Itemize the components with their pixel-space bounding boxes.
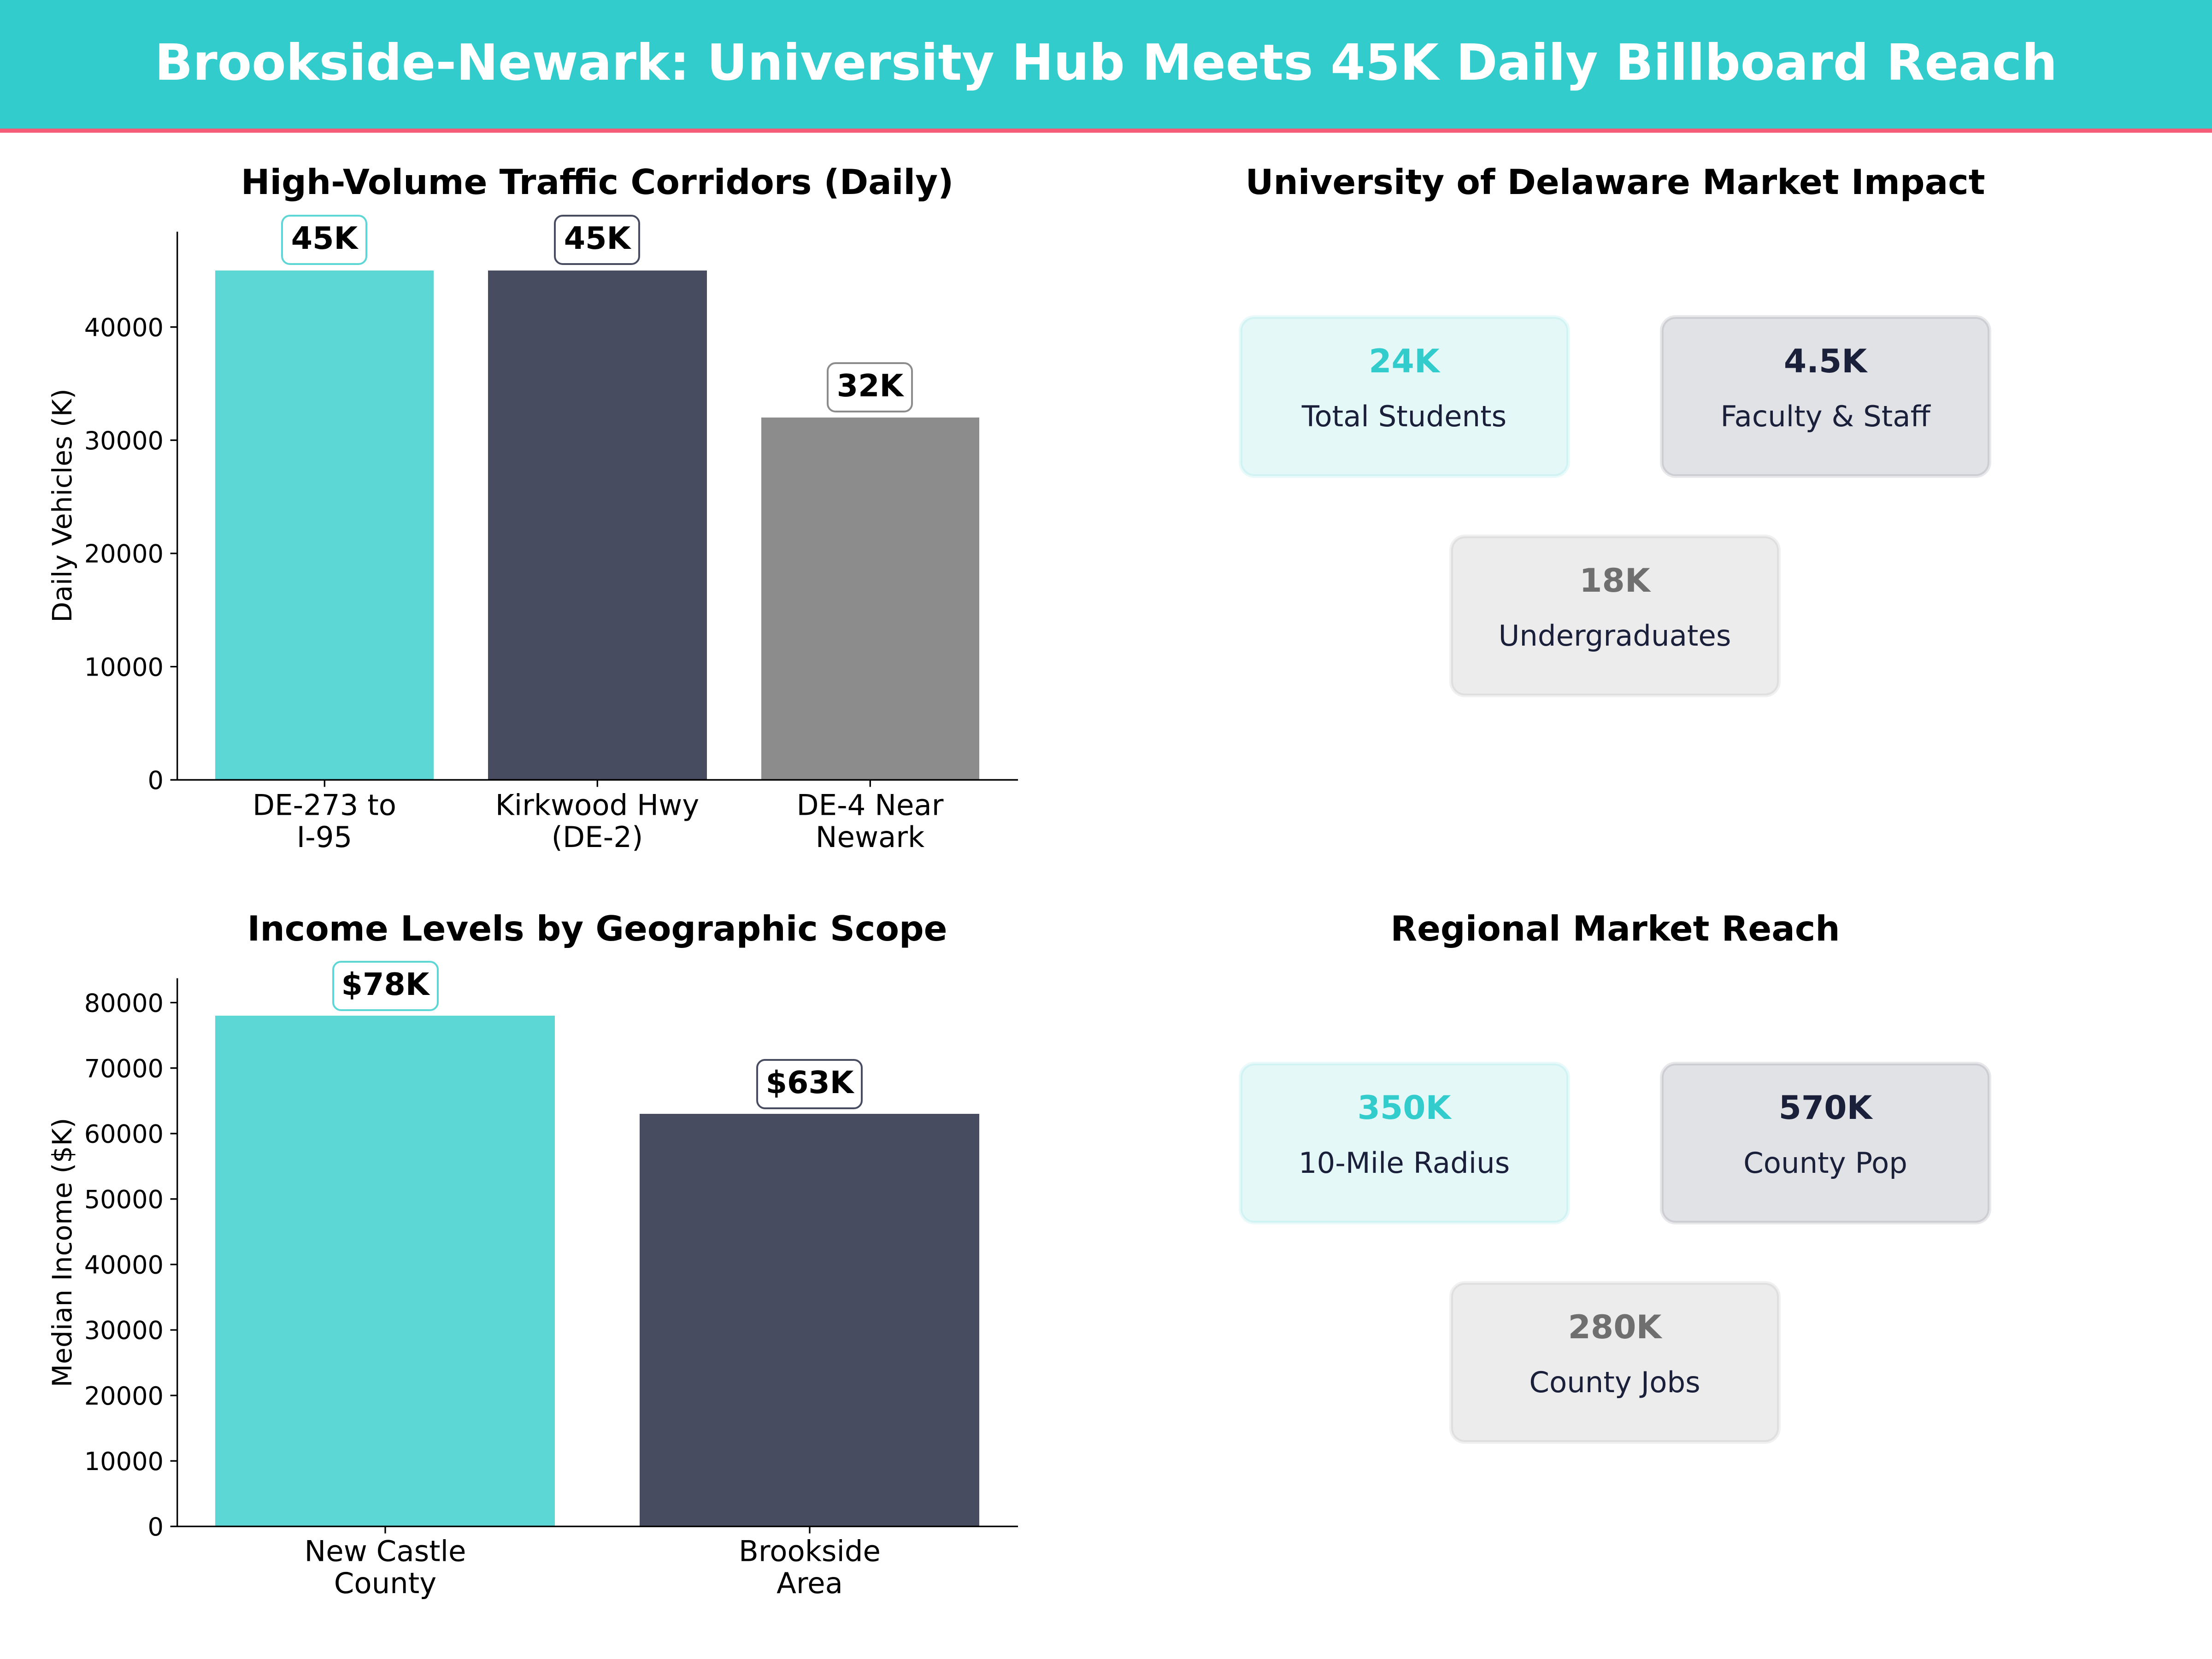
- value callout: 45K navy: [555, 216, 639, 264]
- value callout: 45K teal: 45K: [291, 220, 359, 256]
- card: undergraduates: [1451, 536, 1779, 695]
- y tick labels: income: 10000: [84, 1447, 164, 1476]
- category label: New Castle County: New Castle: [304, 1535, 466, 1568]
- y tick labels: income: 0: [148, 1512, 164, 1541]
- y axis title: median income: Median Income ($K): [47, 1118, 78, 1387]
- panel: income bar chart: [47, 908, 1018, 1600]
- panel: university market impact: [1241, 162, 1989, 695]
- value callout: 45K navy: 45K: [564, 220, 632, 256]
- heading: income: Income Levels by Geographic Scope: [247, 908, 947, 949]
- card: 10-mile radius: [1241, 1064, 1568, 1223]
- card: faculty and staff: [1662, 317, 1989, 476]
- heading: regional: Regional Market Reach: [1390, 908, 1840, 949]
- value callout: $63K: $63K: [766, 1065, 855, 1100]
- axes: traffic: [171, 232, 1018, 787]
- category label: Brookside Area: Area: [777, 1566, 843, 1600]
- y tick labels: income: 20000: [84, 1382, 164, 1411]
- panel: regional market reach: [1241, 908, 1989, 1442]
- value callout: $78K: $78K: [341, 966, 430, 1002]
- header banner: [0, 0, 2212, 133]
- y tick labels: income: 50000: [84, 1185, 164, 1214]
- heading: traffic corridors: High-Volume Traffic Corridors (Daily): [241, 162, 953, 202]
- y tick labels: income: 40000: [84, 1251, 164, 1280]
- bars: income: [215, 1016, 979, 1526]
- category label: Brookside Area: Brookside: [739, 1535, 881, 1568]
- category label: DE-4: Newark: [816, 820, 925, 854]
- y tick labels: traffic: 30000: [84, 426, 164, 455]
- card: total students: [1241, 317, 1568, 476]
- panel: traffic corridors bar chart: [47, 162, 1018, 854]
- card: total students: 24K: [1369, 342, 1441, 380]
- card: 10-mile radius: 350K: [1358, 1088, 1452, 1127]
- card: county population: [1662, 1064, 1989, 1223]
- category label: Kirkwood Hwy: (DE-2): [552, 820, 643, 854]
- card: county population: County Pop: [1743, 1146, 1907, 1180]
- y tick labels: income: 80000: [84, 988, 164, 1018]
- title: Brookside-Newark: University Hub Meets 45K Daily Billboard Reach: [155, 33, 2057, 92]
- card: total students: Total Students: [1301, 400, 1506, 433]
- card: county jobs: County Jobs: [1529, 1365, 1700, 1399]
- category label: Kirkwood Hwy: Kirkwood Hwy: [495, 788, 699, 822]
- value callout: $63K: [757, 1060, 862, 1108]
- value callout: 32K: 32K: [837, 368, 905, 404]
- y tick labels: income: 30000: [84, 1316, 164, 1345]
- card: county population: 570K: [1779, 1088, 1873, 1127]
- y axis title: daily vehicles: Daily Vehicles (K): [47, 388, 78, 623]
- y tick labels: traffic: [84, 313, 164, 795]
- card: faculty and staff: 4.5K: [1784, 342, 1868, 380]
- axes: income: [171, 978, 1018, 1534]
- value callout: 32K: [828, 363, 912, 412]
- heading: university: University of Delaware Market Impact: [1245, 162, 1985, 202]
- card: county jobs: 280K: [1568, 1308, 1663, 1346]
- card: undergraduates: Undergraduates: [1499, 619, 1731, 653]
- card: faculty and staff: Faculty & Staff: [1720, 400, 1931, 433]
- category label: DE-273: I-95: [297, 820, 352, 854]
- category label: DE-273: DE-273 to: [253, 788, 396, 822]
- y tick labels: income: 70000: [84, 1054, 164, 1083]
- value callout: 45K teal: [282, 216, 366, 264]
- y tick labels: income: 60000: [84, 1120, 164, 1148]
- card: undergraduates: 18K: [1579, 561, 1652, 600]
- bars: traffic: [215, 271, 979, 780]
- y tick labels: income: [84, 988, 164, 1541]
- category label: DE-4: DE-4 Near: [796, 788, 944, 822]
- value callout: $78K: [333, 962, 438, 1010]
- y tick labels: traffic: 20000: [84, 540, 164, 569]
- card: 10-mile radius: 10-Mile Radius: [1299, 1146, 1510, 1180]
- category label: New Castle County: County: [334, 1566, 436, 1600]
- y tick labels: traffic: 10000: [84, 653, 164, 682]
- y tick labels: traffic: 0: [148, 766, 164, 795]
- card: county jobs: [1451, 1283, 1779, 1442]
- y tick labels: traffic: 40000: [84, 313, 164, 342]
